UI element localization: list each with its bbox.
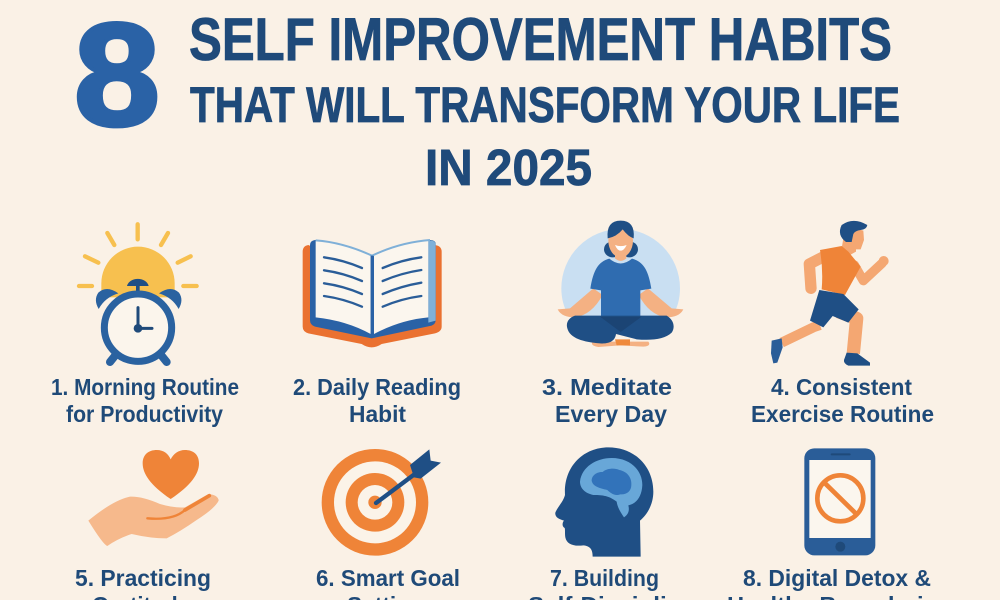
label 5: 5. Practicing bbox=[75, 565, 211, 591]
label 3 bbox=[542, 374, 672, 427]
icon: head with brain bbox=[555, 447, 653, 557]
label 4: 4. Consistent bbox=[771, 374, 912, 400]
title bbox=[74, 0, 900, 196]
label 1: for Productivity bbox=[66, 401, 223, 427]
icon: open book bbox=[303, 240, 442, 347]
label 8 bbox=[727, 565, 950, 600]
label 2: 2. Daily Reading bbox=[293, 374, 461, 400]
label 2 bbox=[293, 374, 461, 427]
icon: runner bbox=[771, 221, 889, 366]
label 1: 1. Morning Routine bbox=[51, 374, 239, 400]
label 7: 7. Building bbox=[550, 565, 659, 591]
icon: sun and alarm clock bbox=[79, 224, 197, 362]
label 4 bbox=[751, 374, 934, 427]
label 6: 6. Smart Goal bbox=[316, 565, 460, 591]
panel: daily reading bbox=[293, 240, 461, 427]
icon: hand with heart bbox=[88, 450, 219, 546]
panel: meditate bbox=[542, 221, 683, 427]
panel: self-discipline bbox=[528, 447, 695, 600]
icon: phone with prohibition sign bbox=[804, 448, 875, 555]
label 3: 3. Meditate bbox=[542, 374, 672, 400]
icon: meditating woman bbox=[558, 221, 683, 347]
panel: gratitude bbox=[75, 450, 219, 600]
label 1 bbox=[51, 374, 239, 427]
panel: digital detox bbox=[727, 448, 950, 600]
panel: exercise bbox=[751, 221, 934, 427]
label 8: 8. Digital Detox & bbox=[743, 565, 931, 591]
label 4: Exercise Routine bbox=[751, 401, 934, 427]
panel: morning routine bbox=[51, 224, 239, 427]
label 2: Habit bbox=[349, 401, 406, 427]
icon: target with arrow bbox=[322, 449, 441, 556]
title line 3: IN 2025 bbox=[425, 139, 592, 196]
label 3: Every Day bbox=[555, 401, 667, 427]
label 7 bbox=[528, 565, 695, 600]
panel: goal setting bbox=[316, 449, 460, 600]
